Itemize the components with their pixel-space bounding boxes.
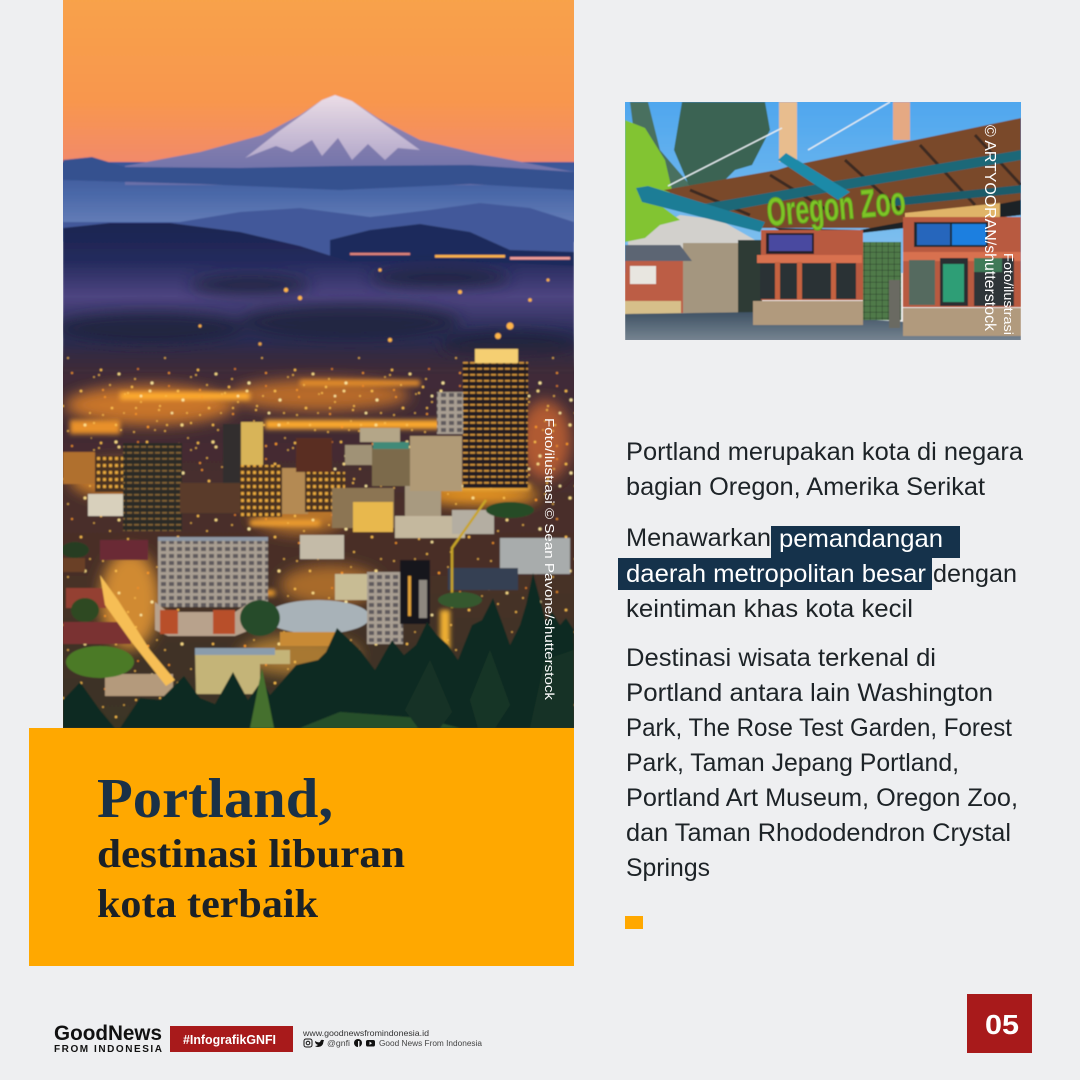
- photo credit: Sean Pavone: Foto/ilustrasi © Sean Pavone/shutterstock: [542, 418, 556, 701]
- sign: Oregon Zoo: Oregon Zoo: [765, 179, 907, 235]
- tall tower: [463, 362, 528, 488]
- photo: Oregon Zoo entrance: [620, 98, 1025, 345]
- haze bands: [60, 162, 580, 242]
- text: intro paragraph: [626, 438, 1023, 501]
- roof: [636, 118, 1021, 240]
- icon: facebook: [354, 1039, 362, 1047]
- green-top building: [372, 448, 410, 486]
- text: highlighted paragraph: dengan: [933, 560, 1017, 588]
- bright tree: [625, 120, 680, 242]
- subtitle: kota terbaik: [97, 881, 319, 926]
- text: destinations paragraph: Portland Art Museum, Oregon Zoo,: [626, 784, 1018, 812]
- text: destinations paragraph: [626, 644, 1018, 882]
- sky: [60, 0, 580, 175]
- dark tree patches: [55, 268, 580, 359]
- mid blocks: [345, 445, 372, 465]
- lower buildings: [195, 650, 290, 694]
- text: highlighted paragraph: daerah metropolitan besar: [626, 560, 926, 588]
- text: destinations paragraph: Destinasi wisata terkenal di: [626, 644, 936, 672]
- city base: [60, 340, 580, 731]
- hashtag badge: #InfografikGNFI: [183, 1033, 276, 1047]
- page number: [967, 994, 1032, 1053]
- photo credits: Oregon Zoo: [981, 125, 1015, 335]
- city lights: [60, 356, 580, 731]
- dark tower: [123, 443, 182, 531]
- accent marker: [625, 916, 643, 929]
- gate: [863, 242, 901, 320]
- back building: [627, 214, 755, 249]
- buildings: [63, 349, 570, 696]
- far ridges: [63, 203, 574, 262]
- right booth: [903, 203, 1021, 336]
- social links: [302, 1028, 483, 1048]
- page number: 05: [985, 1009, 1019, 1040]
- photo credits: Oregon Zoo: Foto/ilustrasi: [1001, 253, 1015, 335]
- posts: [779, 102, 797, 162]
- left booth: [753, 230, 863, 325]
- hashtag badge: [170, 1026, 293, 1052]
- footer logo: GoodNews From Indonesia: [54, 1022, 162, 1055]
- handle: @gnfi: [327, 1039, 350, 1048]
- dark conifers: [630, 102, 690, 195]
- title panel: [29, 728, 574, 966]
- striped tower: [223, 424, 241, 484]
- subtitle: destinasi liburan: [97, 831, 405, 876]
- text: highlighted paragraph: pemandangan: [779, 525, 943, 553]
- bright street: [100, 575, 175, 686]
- left hut: [625, 245, 692, 314]
- footer logo: GoodNews From Indonesia: FROM INDONESIA: [54, 1044, 162, 1055]
- low buildings: [88, 494, 123, 516]
- forest: [63, 573, 574, 728]
- cables: [668, 102, 890, 186]
- valley: [63, 223, 574, 370]
- text: destinations paragraph: Portland antara lain Washington: [626, 679, 993, 707]
- text: highlighted paragraph: [618, 524, 1017, 623]
- icon: twitter: [315, 1040, 324, 1047]
- title: Portland: Portland,: [97, 768, 333, 830]
- curved roof: [266, 600, 370, 634]
- teal beams: [636, 186, 765, 232]
- valley lights: [198, 253, 570, 346]
- photo: Portland skyline with Mount Hood: [55, 0, 611, 731]
- icon: instagram: [304, 1039, 312, 1047]
- ground: [625, 312, 1021, 340]
- brown building: [296, 438, 332, 472]
- channel name: Good News From Indonesia: [379, 1039, 483, 1048]
- green trees in the glow: [61, 502, 534, 678]
- red and cream block: [155, 602, 250, 636]
- person: [889, 280, 900, 328]
- social links: www.goodnewsfromindonesia.id: [302, 1028, 429, 1038]
- white tower: [367, 572, 403, 644]
- text: destinations paragraph: dan Taman Rhododendron Crystal: [626, 819, 1011, 847]
- bright streaks: [70, 380, 530, 650]
- highlight bars: [618, 526, 960, 590]
- city glow: [65, 379, 571, 675]
- text: highlighted paragraph: keintiman khas kota kecil: [626, 595, 913, 623]
- subtitle: [97, 831, 405, 926]
- text: destinations paragraph: Park, Taman Jepang Portland,: [626, 749, 959, 777]
- icon: youtube: [366, 1040, 375, 1046]
- big round apartment: [158, 539, 268, 607]
- text: destinations paragraph: Springs: [626, 854, 710, 882]
- text: destinations paragraph: Park, The Rose Test Garden, Forest: [626, 714, 1012, 742]
- crane: [452, 500, 486, 608]
- footer logo: GoodNews From Indonesia: GoodNews: [54, 1022, 162, 1045]
- text: intro paragraph: Portland merupakan kota di negara: [626, 438, 1023, 466]
- text: intro paragraph: bagian Oregon, Amerika Serikat: [626, 473, 985, 501]
- mountain: [63, 95, 574, 190]
- zoo sky: [620, 98, 1025, 273]
- text: highlighted paragraph: Menawarkan: [626, 524, 771, 552]
- photo credits: Oregon Zoo: © ARTYOORAN/shutterstock: [981, 125, 998, 331]
